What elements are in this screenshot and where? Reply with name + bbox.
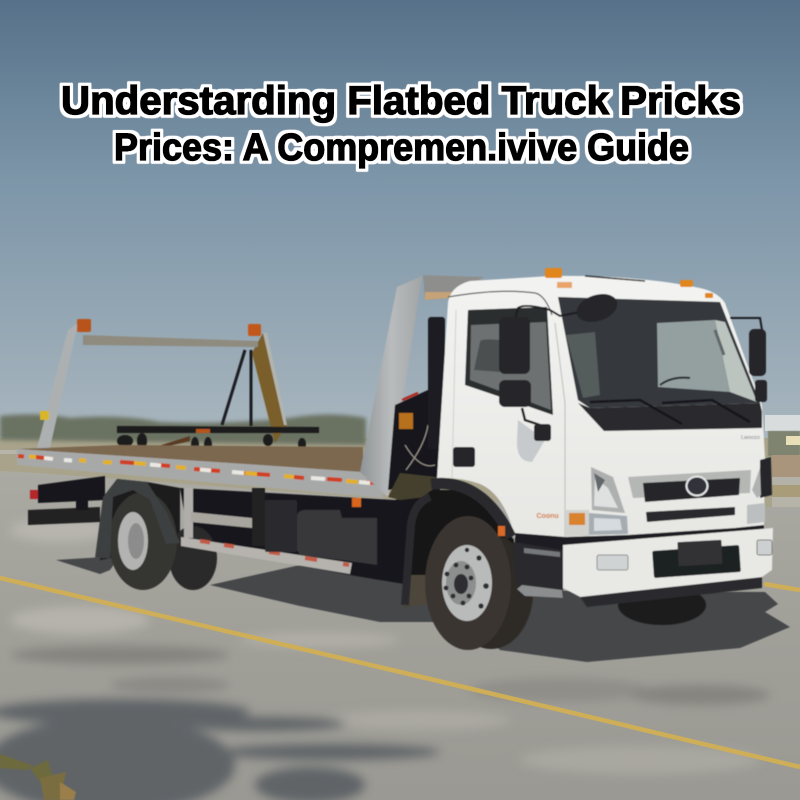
bumper	[563, 528, 773, 607]
cab entry steps	[498, 526, 563, 598]
underbody strip	[515, 525, 764, 552]
door details	[452, 310, 565, 537]
wheel arch	[405, 483, 511, 605]
door details: Coonu	[536, 513, 559, 520]
wheel lift carriage	[117, 426, 319, 453]
distant landscape	[0, 414, 800, 518]
chassis	[28, 476, 440, 590]
truck ground shadow	[56, 556, 790, 662]
front axle wheel behind bumper	[618, 585, 706, 625]
truck	[17, 268, 773, 650]
main headboard	[360, 275, 484, 497]
mirrors	[499, 289, 767, 441]
rear headboard frame	[37, 319, 287, 448]
front wheel assembly	[403, 490, 533, 650]
road surface	[0, 471, 800, 800]
road marking: yellow line	[0, 578, 800, 767]
cab body	[437, 276, 765, 546]
concrete mottling	[10, 518, 770, 774]
title line 1: Understarding Flatbed Truck Pricks	[61, 79, 741, 123]
roof marker lights	[545, 268, 713, 298]
wiper cowl band	[578, 400, 762, 431]
side window	[448, 291, 553, 415]
deck side rail	[17, 449, 383, 498]
rear wheels and fender	[95, 479, 217, 590]
flatbed deck	[17, 445, 363, 472]
tree shadow foreground	[0, 699, 440, 800]
front grille	[628, 470, 751, 522]
reflective stripes	[18, 456, 375, 483]
sky background	[0, 0, 800, 440]
headlights	[565, 457, 772, 536]
foliage corner	[0, 754, 76, 800]
windshield	[558, 297, 760, 408]
engine equipment behind cab	[388, 317, 445, 500]
title	[61, 79, 741, 169]
title line 2: Prices: A Compremen.ivive Guide	[114, 127, 689, 169]
brand logo	[686, 476, 708, 496]
cab badge: Lwoozo	[741, 435, 760, 441]
fuel tanks	[252, 488, 377, 565]
side guard rails	[181, 488, 352, 574]
